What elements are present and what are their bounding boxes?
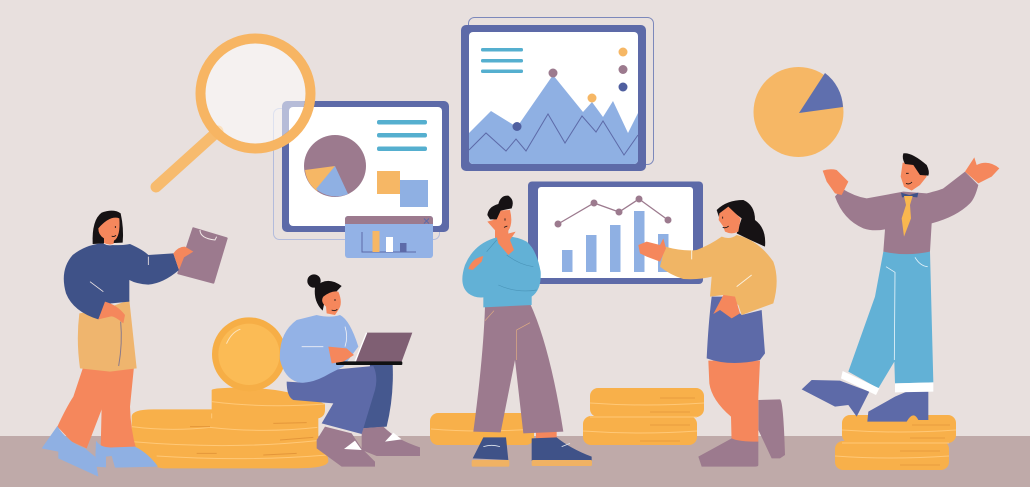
face <box>719 207 741 233</box>
shirt <box>835 172 978 254</box>
face <box>901 163 927 191</box>
sweater <box>462 236 541 307</box>
cuffs <box>841 371 933 395</box>
text lines <box>481 48 523 73</box>
neck <box>495 227 508 238</box>
coins behind man <box>430 413 534 445</box>
laptop <box>336 333 412 365</box>
skirt <box>707 297 765 363</box>
panel: pie chart dashboard <box>274 101 449 240</box>
person: thinking man <box>462 196 592 467</box>
hands <box>98 247 193 323</box>
legs <box>708 361 760 444</box>
squares <box>377 171 428 207</box>
boots <box>317 427 420 467</box>
hands <box>823 157 999 195</box>
chart markers <box>512 68 596 131</box>
tie <box>902 196 913 237</box>
line chart <box>469 114 638 155</box>
text lines <box>377 120 427 151</box>
sweater <box>660 235 777 315</box>
shoes <box>472 437 592 467</box>
trend line <box>554 196 672 228</box>
face <box>487 210 511 232</box>
icon: magnifying glass <box>156 38 310 187</box>
pants <box>473 303 563 433</box>
shoes <box>802 380 928 422</box>
sweater <box>64 243 179 319</box>
panel: bar and line chart dashboard <box>528 182 703 284</box>
icon: standing coin <box>212 317 286 391</box>
pie chart <box>304 135 366 197</box>
coins centre stack <box>583 388 704 445</box>
hair <box>903 153 929 176</box>
person: man with raised arms <box>802 153 999 422</box>
person: woman pointing at chart <box>638 200 785 467</box>
coins under presenter <box>835 415 956 470</box>
person: woman with laptop <box>280 274 420 467</box>
area chart <box>469 75 638 164</box>
skirt <box>78 300 137 372</box>
face <box>322 291 341 315</box>
hands <box>638 238 740 318</box>
person: woman with clipboard <box>42 211 227 477</box>
hand <box>328 347 354 363</box>
legend dots <box>618 48 628 92</box>
small bar chart window <box>345 216 433 258</box>
icon: pie chart <box>754 67 844 157</box>
sweater <box>280 315 358 383</box>
ankle <box>536 430 557 440</box>
pants <box>287 366 376 434</box>
panel: mountain chart dashboard <box>461 18 654 171</box>
front shoe <box>698 438 758 467</box>
hair bun <box>307 274 342 311</box>
hands <box>468 232 516 270</box>
bow tie <box>901 193 918 197</box>
coins under seated woman <box>130 317 328 468</box>
bars <box>562 211 668 272</box>
shoes <box>42 426 158 477</box>
socks <box>344 433 402 450</box>
hair <box>93 211 123 244</box>
hair <box>717 200 765 247</box>
face <box>98 218 120 245</box>
back leg <box>363 365 393 428</box>
back shoe <box>758 399 785 458</box>
floor <box>0 436 1030 487</box>
legs <box>57 367 136 448</box>
pants <box>848 252 933 388</box>
hair <box>487 196 513 219</box>
clipboard <box>178 228 227 283</box>
